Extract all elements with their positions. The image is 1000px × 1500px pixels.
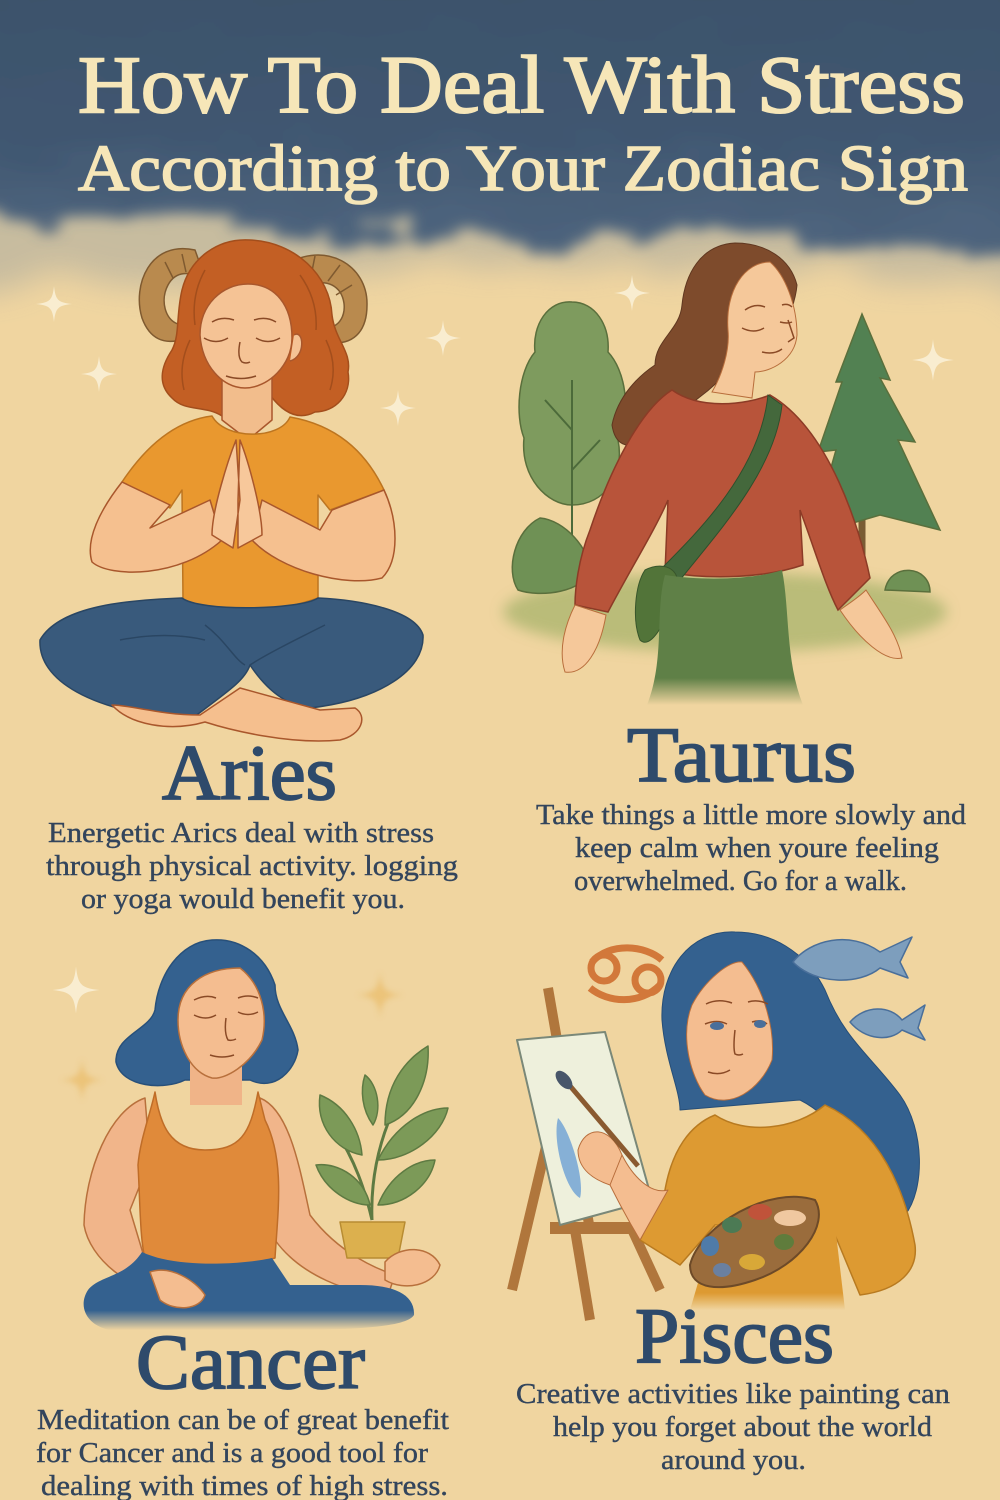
text: Taurus description: overwhelmed. Go for a walk. — [574, 865, 907, 897]
neck — [222, 375, 272, 440]
heading: Aries: Aries — [162, 729, 337, 816]
text: Pisces description: Creative activities like painting can — [516, 1378, 951, 1410]
horns — [139, 249, 367, 343]
hair — [162, 240, 349, 416]
shirt — [122, 416, 384, 610]
plant — [316, 1046, 448, 1220]
text: Aries description — [46, 817, 458, 915]
hair — [662, 932, 919, 1215]
sparkles — [36, 275, 954, 1013]
text: Cancer description — [36, 1404, 449, 1500]
strap — [660, 395, 782, 580]
title — [78, 39, 968, 205]
palette — [690, 1197, 819, 1287]
soft stars — [60, 972, 403, 1102]
hands — [150, 1270, 205, 1308]
feet — [112, 688, 362, 741]
text: Cancer description: for Cancer and is a good tool for — [36, 1437, 428, 1469]
illustration: Cancer — [60, 940, 448, 1330]
heading: Pisces: Pisces — [635, 1292, 834, 1379]
text: Taurus description: Take things a little more slowly and — [536, 799, 967, 831]
text: Pisces description — [516, 1378, 951, 1476]
arm — [605, 1155, 668, 1240]
illustration: Taurus — [503, 243, 947, 705]
face — [687, 962, 773, 1100]
illustration: Pisces — [512, 932, 925, 1320]
face — [712, 262, 797, 398]
text: Taurus description: keep calm when youre feeling — [575, 832, 939, 864]
fish — [793, 937, 925, 1040]
face — [178, 968, 264, 1078]
hair — [612, 243, 797, 445]
brush — [565, 1080, 638, 1166]
neck — [190, 1060, 242, 1105]
canvas — [517, 1032, 652, 1225]
text: Taurus description — [536, 799, 967, 897]
text: Aries description: through physical activity. logging — [46, 850, 458, 882]
legs — [40, 598, 423, 720]
easel — [512, 988, 660, 1320]
text: Cancer description: Meditation can be of great benefit — [37, 1404, 449, 1436]
ground — [503, 572, 947, 652]
torso arms — [84, 1098, 195, 1295]
text: Aries description: or yoga would benefit you. — [81, 883, 405, 915]
text: Pisces description: help you forget about the world — [553, 1411, 933, 1443]
face — [200, 284, 292, 388]
title: How To Deal With Stress — [78, 39, 965, 130]
heading: Cancer: Cancer — [136, 1318, 365, 1405]
heading: Taurus: Taurus — [627, 711, 856, 798]
hands — [562, 605, 606, 672]
sky banner — [0, 0, 1000, 305]
sweater — [575, 390, 870, 612]
sweater — [640, 1105, 915, 1295]
arms — [90, 482, 222, 572]
text: Aries description: Energetic Arics deal with stress — [48, 817, 434, 849]
text: Pisces description: around you. — [661, 1444, 806, 1476]
pot — [340, 1222, 405, 1258]
illustration: Aries — [40, 240, 423, 741]
trees — [512, 302, 940, 593]
title: According to Your Zodiac Sign — [78, 132, 968, 205]
pants — [647, 570, 803, 705]
cancer glyph — [590, 948, 662, 1000]
legs — [84, 1252, 414, 1330]
hand — [578, 1132, 622, 1185]
hair — [116, 940, 298, 1086]
hands — [212, 440, 262, 548]
